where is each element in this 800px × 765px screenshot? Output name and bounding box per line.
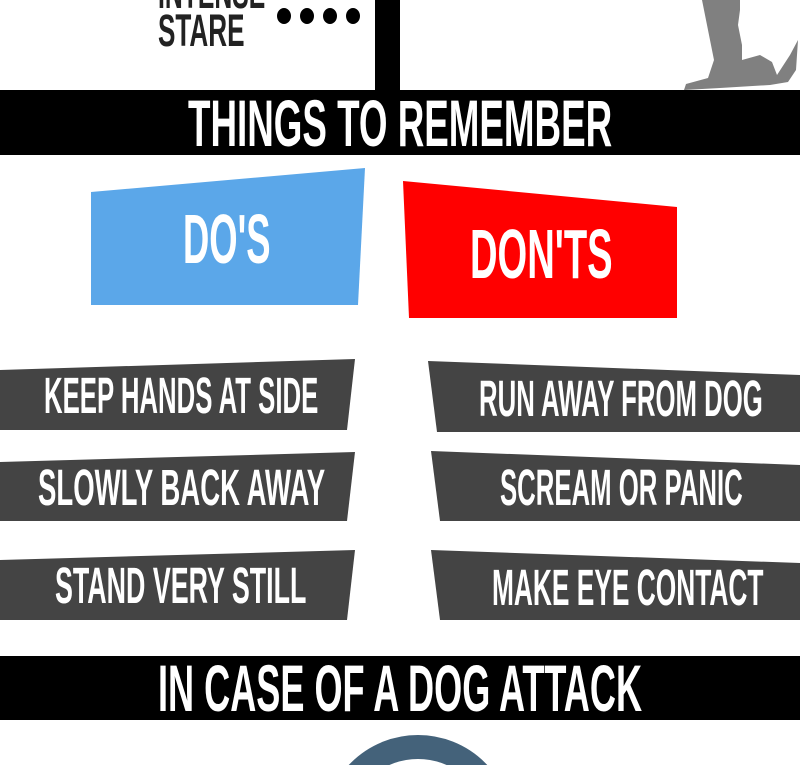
icon: circle ring <box>348 735 488 765</box>
list: do's items: STAND VERY STILL <box>55 557 306 614</box>
list: do's items: KEEP HANDS AT SIDE <box>44 367 318 424</box>
list: don'ts items <box>428 361 800 620</box>
heading band: in case of a dog attack <box>0 656 800 720</box>
icon: dog silhouette <box>684 0 798 90</box>
panel: do's: DO'S <box>183 200 271 278</box>
list: do's items: SLOWLY BACK AWAY <box>38 459 325 516</box>
top divider bar <box>375 0 400 92</box>
panel: don'ts: DON'TS <box>470 215 613 293</box>
heading band: in case of a dog attack: IN CASE OF A DOG ATTACK <box>158 651 642 725</box>
panel: do's <box>91 168 365 305</box>
label: intense stare: STARE <box>158 5 245 56</box>
list: do's items <box>0 359 355 620</box>
heading band: things to remember: THINGS TO REMEMBER <box>188 86 612 160</box>
heading band: things to remember <box>0 90 800 155</box>
list: don'ts items: MAKE EYE CONTACT <box>492 559 763 616</box>
list: don'ts items: SCREAM OR PANIC <box>500 459 743 516</box>
list: don'ts items: RUN AWAY FROM DOG <box>479 370 763 427</box>
dots <box>277 8 360 24</box>
panel: don'ts <box>403 181 677 318</box>
